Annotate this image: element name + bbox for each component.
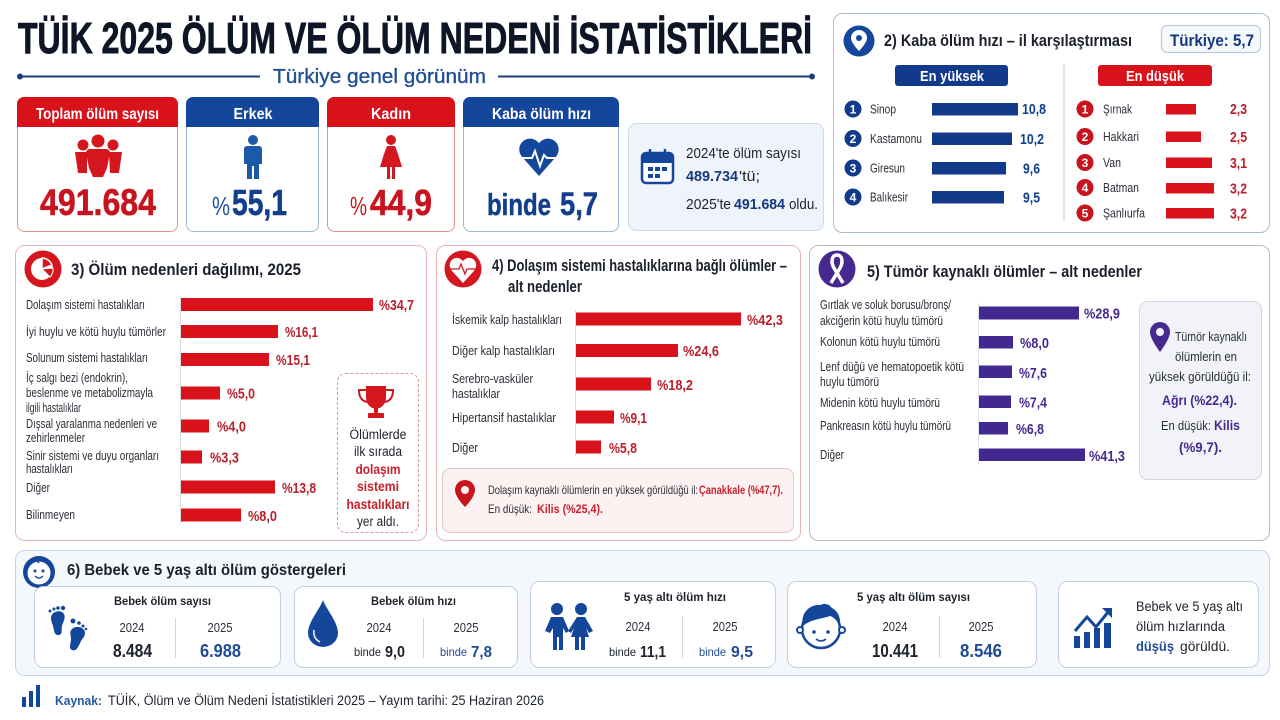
row: Dolaşım [26,297,414,314]
side text: Ağrı (%22,4). [1162,392,1237,408]
source line [22,685,544,708]
row: Şanlıurfa: 3,2 [1230,206,1247,222]
side text: En düşük: [1161,418,1211,433]
row: pankreas: Pankreasın kötü huylu tümörü [820,419,951,433]
row: mide: Midenin kötü huylu tümörü [820,396,940,410]
icon: calendar [642,149,673,183]
source text: TÜİK, Ölüm ve Ölüm Nedeni İstatistikleri 2025 – Yayım tarihi: 25 Haziran 2026 [108,693,544,708]
row: kolon: Kolonun kötü huylu tümörü [820,335,940,349]
row: lenf: huylu tümörü [820,375,879,389]
list: en düşük [1076,100,1247,222]
side text [1149,330,1251,455]
value: % [350,191,367,221]
callout text: Çanakkale (%47,7). [699,483,783,497]
row: Kastamonu [844,130,1044,148]
values: binde [699,645,726,659]
card title: Bebek ölüm hızı [371,594,456,608]
icon: child face [797,604,845,648]
row: Van: Van [1103,156,1121,170]
text: 'tü; [739,168,760,185]
row: endokrin [26,371,255,415]
row: Balıkesir: 9,5 [1023,190,1040,206]
row: iskemik: İskemik kalp hastalıkları [452,312,562,327]
row: Batman: 4 [1082,181,1089,195]
bar chart: tumours [820,298,1125,465]
row: diğer kalp: %24,6 [683,343,719,360]
icon: trend chart [1074,608,1112,648]
header: en yüksek: En yüksek [920,68,985,85]
value: 44,9 [370,182,432,223]
row: sinir: hastalıkları [26,462,73,476]
row: tümörler [26,324,318,341]
icon: feet [48,606,87,650]
side text: (%9,7). [1179,439,1222,455]
row: Hakkari: 2,5 [1230,129,1247,146]
row: Kastamonu: Kastamonu [870,132,922,146]
values: 2025 [454,621,479,635]
row: hipertansif: Hipertansif hastalıklar [452,410,557,425]
text [686,145,818,213]
callout text [346,427,410,529]
row: endokrin: %5,0 [227,386,255,402]
row: serebro: hastalıklar [452,386,501,401]
icon: people [75,134,122,177]
side text: yüksek görüldüğü il: [1149,370,1251,384]
row: bilinmeyen: %8,0 [248,508,277,525]
row: bilinmeyen: Bilinmeyen [26,508,75,522]
icon: drop [308,600,338,647]
row: gırtlak [820,298,1120,328]
value: 55,1 [232,182,287,223]
row: pankreas [820,419,1044,438]
card: bebek ölüm sayısı [34,586,280,668]
row: sinir [26,449,239,476]
icon: pin [1150,322,1170,352]
panel 5: tümör kaynaklı ölümler [810,246,1270,540]
row: diğer kalp: Diğer kalp hastalıkları [452,343,555,358]
row: Van: 3 [1082,156,1089,170]
row: bilinmeyen [26,508,277,525]
row: Dolaşım: Dolaşım sistemi hastalıkları [26,298,145,312]
values: 2025 [968,620,994,634]
subtitle with rule [17,66,815,88]
row: Şanlıurfa: Şanlıurfa [1103,206,1145,220]
row: solunum: Solunum sistemi hastalıkları [26,351,148,365]
values: 8.484 [113,641,152,661]
text: 489.734 [686,168,739,185]
row: endokrin: İç salgı bezi (endokrin), [26,371,128,385]
row: Kastamonu: 10,2 [1020,131,1044,148]
values: 6.988 [200,641,241,661]
text: 491.684 [734,196,786,213]
row: diğer kalp [452,343,719,360]
row: Hakkari: 2 [1082,130,1089,144]
row: Balıkesir: 4 [850,190,857,204]
row: diğer [452,440,637,457]
row: iskemik [452,312,783,329]
row: mide [820,394,1048,412]
row: serebro: %18,2 [657,377,693,394]
row: gırtlak: Gırtlak ve soluk borusu/bronş/ [820,298,951,312]
row: dışsal: Dışsal yaralanma nedenleri ve [26,417,157,431]
callout text: yer aldı. [357,514,399,529]
row: gırtlak: akciğerin kötü huylu tümörü [820,314,943,328]
row: tümörler: İyi huylu ve kötü huylu tümörler [26,325,166,339]
icon: pie chart [24,250,62,288]
value: 5,7 [560,186,598,222]
row: Van: 3,1 [1230,155,1247,172]
row: Şırnak: 1 [1082,102,1089,116]
card: kadın [327,97,455,232]
row: Van [1076,154,1247,172]
row: Şırnak: 2,3 [1230,101,1247,118]
values [609,616,753,661]
icon: pin [844,26,874,56]
callout text: hastalıkları [346,497,410,512]
value [350,182,432,223]
row: Giresun: Giresun [870,162,905,176]
value: % [212,191,230,221]
values: 2024 [366,621,392,635]
panel 6: bebek ve 5 yaş altı [16,550,1270,676]
value [212,182,287,223]
row: hipertansif [452,410,647,427]
row: Sinop: 10,8 [1022,101,1046,118]
row: endokrin: beslenme ve metabolizmayla [26,386,153,400]
callout: dolaşım il [442,468,794,532]
row: lenf: %7,6 [1019,365,1047,382]
card: toplam ölüm sayısı [17,97,178,232]
row: Şırnak [1076,100,1247,118]
row: sinir: %3,3 [210,450,239,466]
row: diğer: %13,8 [282,480,316,497]
side text: Kilis [1214,417,1240,433]
row: hipertansif: %9,1 [620,410,647,427]
icon: ribbon [818,250,856,288]
row: dışsal: zehirlenmeler [26,431,85,445]
card title: 5 yaş altı ölüm sayısı [857,590,970,604]
row: mide: %7,4 [1019,394,1048,412]
icon: baby [23,556,55,588]
values: binde [440,645,467,659]
heading: alt nedenler [508,278,582,296]
callout text: Ölümlerde [350,427,406,442]
card: düşüş notu [1058,582,1258,668]
list: en yüksek [844,100,1046,206]
row: tümörler: %16,1 [285,324,318,341]
note text: görüldü. [1180,639,1230,654]
values: 10.441 [872,641,918,661]
callout text [488,483,783,516]
card: kaba ölüm hızı: Kaba ölüm hızı [492,106,591,123]
row: diğer: %41,3 [1089,448,1125,465]
panel 4: dolaşım sistemi [436,246,800,540]
row: Balıkesir [844,188,1040,206]
row: Şanlıurfa: 5 [1082,206,1089,220]
source text: Kaynak: [55,693,102,708]
row: kolon [820,335,1049,352]
side box: tümör il [1140,302,1262,480]
heading: 4) Dolaşım sistemi hastalıklarına bağlı ölümler – [492,257,787,275]
badge: Türkiye: Türkiye: 5,7 [1170,31,1254,50]
row: lenf [820,360,1047,389]
icon: man [244,135,262,179]
icon: heart [444,250,482,288]
heading: 5) Tümör kaynaklı ölümler – alt nedenler [867,262,1142,281]
values: 7,8 [471,644,492,661]
side text: Tümör kaynaklı [1175,330,1247,344]
row: pankreas: %6,8 [1016,421,1044,438]
row: diğer: %5,8 [609,440,637,457]
values: 2025 [208,621,233,635]
row: diğer: Diğer [26,481,50,495]
title: TÜİK 2025 ÖLÜM VE ÖLÜM NEDENİ İSTATİSTİKLERİ [18,14,812,63]
callout text: En düşük: [488,502,532,516]
row: Dolaşım: %34,7 [379,297,414,314]
values: 2024 [120,621,145,635]
icon: woman [380,135,402,179]
row: Batman [1076,179,1247,198]
row: Sinop: 1 [850,102,857,116]
row: diğer [26,480,316,497]
values [354,618,492,661]
values [872,616,1002,661]
note text: ölüm hızlarında [1136,619,1225,634]
row: serebro: Serebro-vasküler [452,371,534,386]
value: 491.684 [40,182,156,223]
values: 8.546 [960,641,1002,661]
header: en düşük: En düşük [1126,68,1185,85]
text: oldu. [789,196,818,213]
row: diğer [820,448,1125,465]
callout: ilk sırada [338,374,418,532]
side text: ölümlerin en [1175,350,1237,364]
row: dışsal [26,417,246,445]
row: iskemik: %42,3 [747,312,783,329]
row: Giresun [844,160,1040,178]
card: kaba ölüm hızı [463,97,619,232]
header: en düşük [1098,65,1212,86]
values: 9,5 [731,644,753,661]
card: erkek [186,97,319,232]
values: 2025 [712,620,738,634]
row: Giresun: 9,6 [1023,160,1040,178]
row: Şanlıurfa [1076,204,1247,222]
row: Batman: Batman [1103,181,1139,195]
row: Balıkesir: Balıkesir [870,190,908,204]
row: Şırnak: Şırnak [1103,102,1133,116]
callout text: sistemi [357,479,399,494]
value: binde [487,187,551,222]
row: solunum: %15,1 [276,352,310,369]
text: 2024'te ölüm sayısı [686,145,801,162]
row: Hakkari [1076,128,1247,146]
icon: bars [22,685,40,707]
note text [1136,599,1243,654]
panel 3: ölüm nedenleri dağılımı [16,246,426,540]
header: en yüksek [895,65,1008,86]
card: kadın: Kadın [371,106,411,123]
card title: 5 yaş altı ölüm hızı [624,590,726,604]
values: binde [354,645,381,659]
panel 2: kaba ölüm hızı il karşılaştırması [834,14,1270,232]
row: diğer: Diğer [452,440,479,455]
info box: 2024 vs 2025 [628,124,824,230]
callout text: dolaşım [356,462,400,477]
row: endokrin: ilgili hastalıklar [26,401,81,415]
row: Sinop: Sinop [870,102,896,116]
heading: 3) Ölüm nedenleri dağılımı, 2025 [71,260,301,279]
card: bebek ölüm hızı [294,586,518,668]
heading [492,257,787,296]
row: gırtlak: %28,9 [1084,306,1120,322]
card: 5 yaş altı ölüm sayısı [788,582,1036,668]
text: 2025'te [686,196,731,213]
row: dışsal: %4,0 [217,418,246,436]
values [113,618,241,661]
row: Hakkari: Hakkari [1103,130,1139,144]
values: 2024 [882,620,908,634]
row: diğer: Diğer [820,448,844,462]
heading: 2) Kaba ölüm hızı – il karşılaştırması [884,31,1132,50]
heading: 6) Bebek ve 5 yaş altı ölüm göstergeleri [67,562,346,579]
card: 5 yaş altı ölüm hızı [530,582,776,668]
values: 2024 [626,620,651,634]
row: solunum [26,351,310,369]
card: toplam ölüm sayısı: Toplam ölüm sayısı [36,106,159,123]
card title: Bebek ölüm sayısı [114,594,211,608]
badge: Türkiye [1162,26,1260,52]
note text: düşüş [1136,639,1174,654]
icon: children [545,603,593,650]
row: Sinop [844,100,1046,118]
bar chart: circulatory [452,312,783,457]
values: 11,1 [640,644,666,661]
row: Giresun: 3 [850,162,857,176]
row: Batman: 3,2 [1230,180,1247,198]
bar chart: causes [26,297,414,525]
callout text: Dolaşım kaynaklı ölümlerin en yüksek görüldüğü il: [488,483,698,497]
values: binde [609,645,636,659]
card: erkek: Erkek [234,106,273,123]
callout text: ilk sırada [354,444,402,459]
row: lenf: Lenf düğü ve hematopoetik kötü [820,360,964,374]
callout text: Kilis (%25,4). [537,502,603,516]
note text: Bebek ve 5 yaş altı [1136,599,1243,614]
values: 9,0 [385,644,405,661]
icon: trophy [359,386,393,418]
row: Kastamonu: 2 [850,132,857,146]
subtitle with rule: Türkiye genel görünüm [273,66,486,88]
icon: pin [455,480,475,507]
row: serebro [452,371,693,401]
row: kolon: %8,0 [1020,335,1049,352]
row: sinir: Sinir sistemi ve duyu organları [26,449,159,463]
icon: heart pulse [519,139,559,176]
